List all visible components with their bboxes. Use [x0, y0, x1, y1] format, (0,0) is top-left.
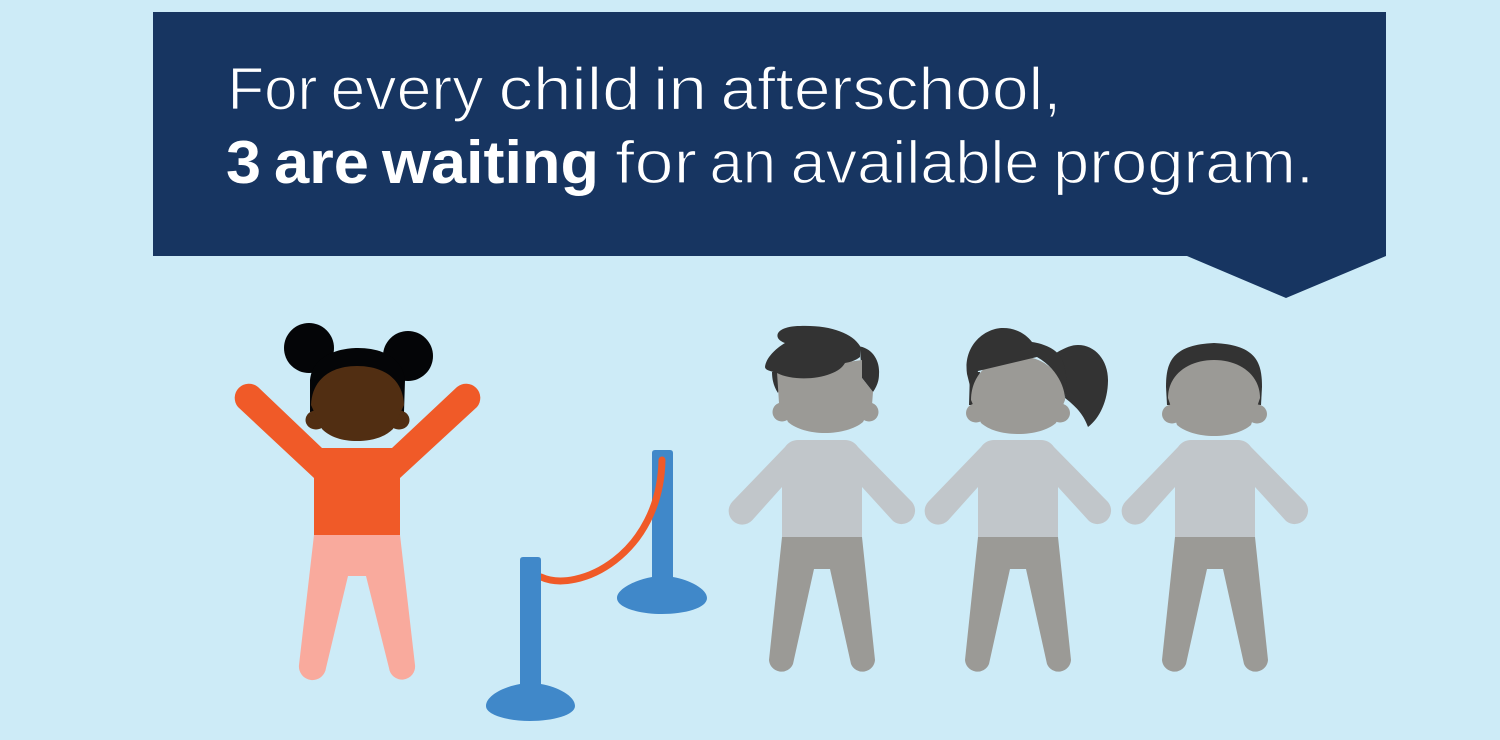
- headline line 1: [228, 56, 1062, 122]
- headline line 2: [226, 129, 1314, 196]
- headline line 2: are: [274, 129, 369, 196]
- headline line 1: in: [653, 56, 707, 122]
- headline line 2: available: [790, 129, 1040, 196]
- headline line 1: afterschool,: [720, 56, 1062, 122]
- headline line 1: every: [330, 56, 484, 122]
- headline line 1: For: [228, 56, 318, 122]
- waiting child 2: [925, 328, 1111, 672]
- waiting child 3: [1122, 343, 1308, 672]
- headline line 2: program.: [1053, 129, 1314, 196]
- headline line 2: an: [710, 129, 776, 196]
- waiting child 1: [729, 326, 915, 672]
- rope barrier stanchions: [486, 450, 707, 721]
- headline line 1: child: [498, 56, 640, 122]
- speech banner: [153, 12, 1386, 298]
- child in orange celebrating: [235, 323, 480, 680]
- headline line 2: 3: [226, 129, 261, 196]
- headline line 2: for: [615, 129, 697, 196]
- headline line 2: waiting: [381, 129, 599, 196]
